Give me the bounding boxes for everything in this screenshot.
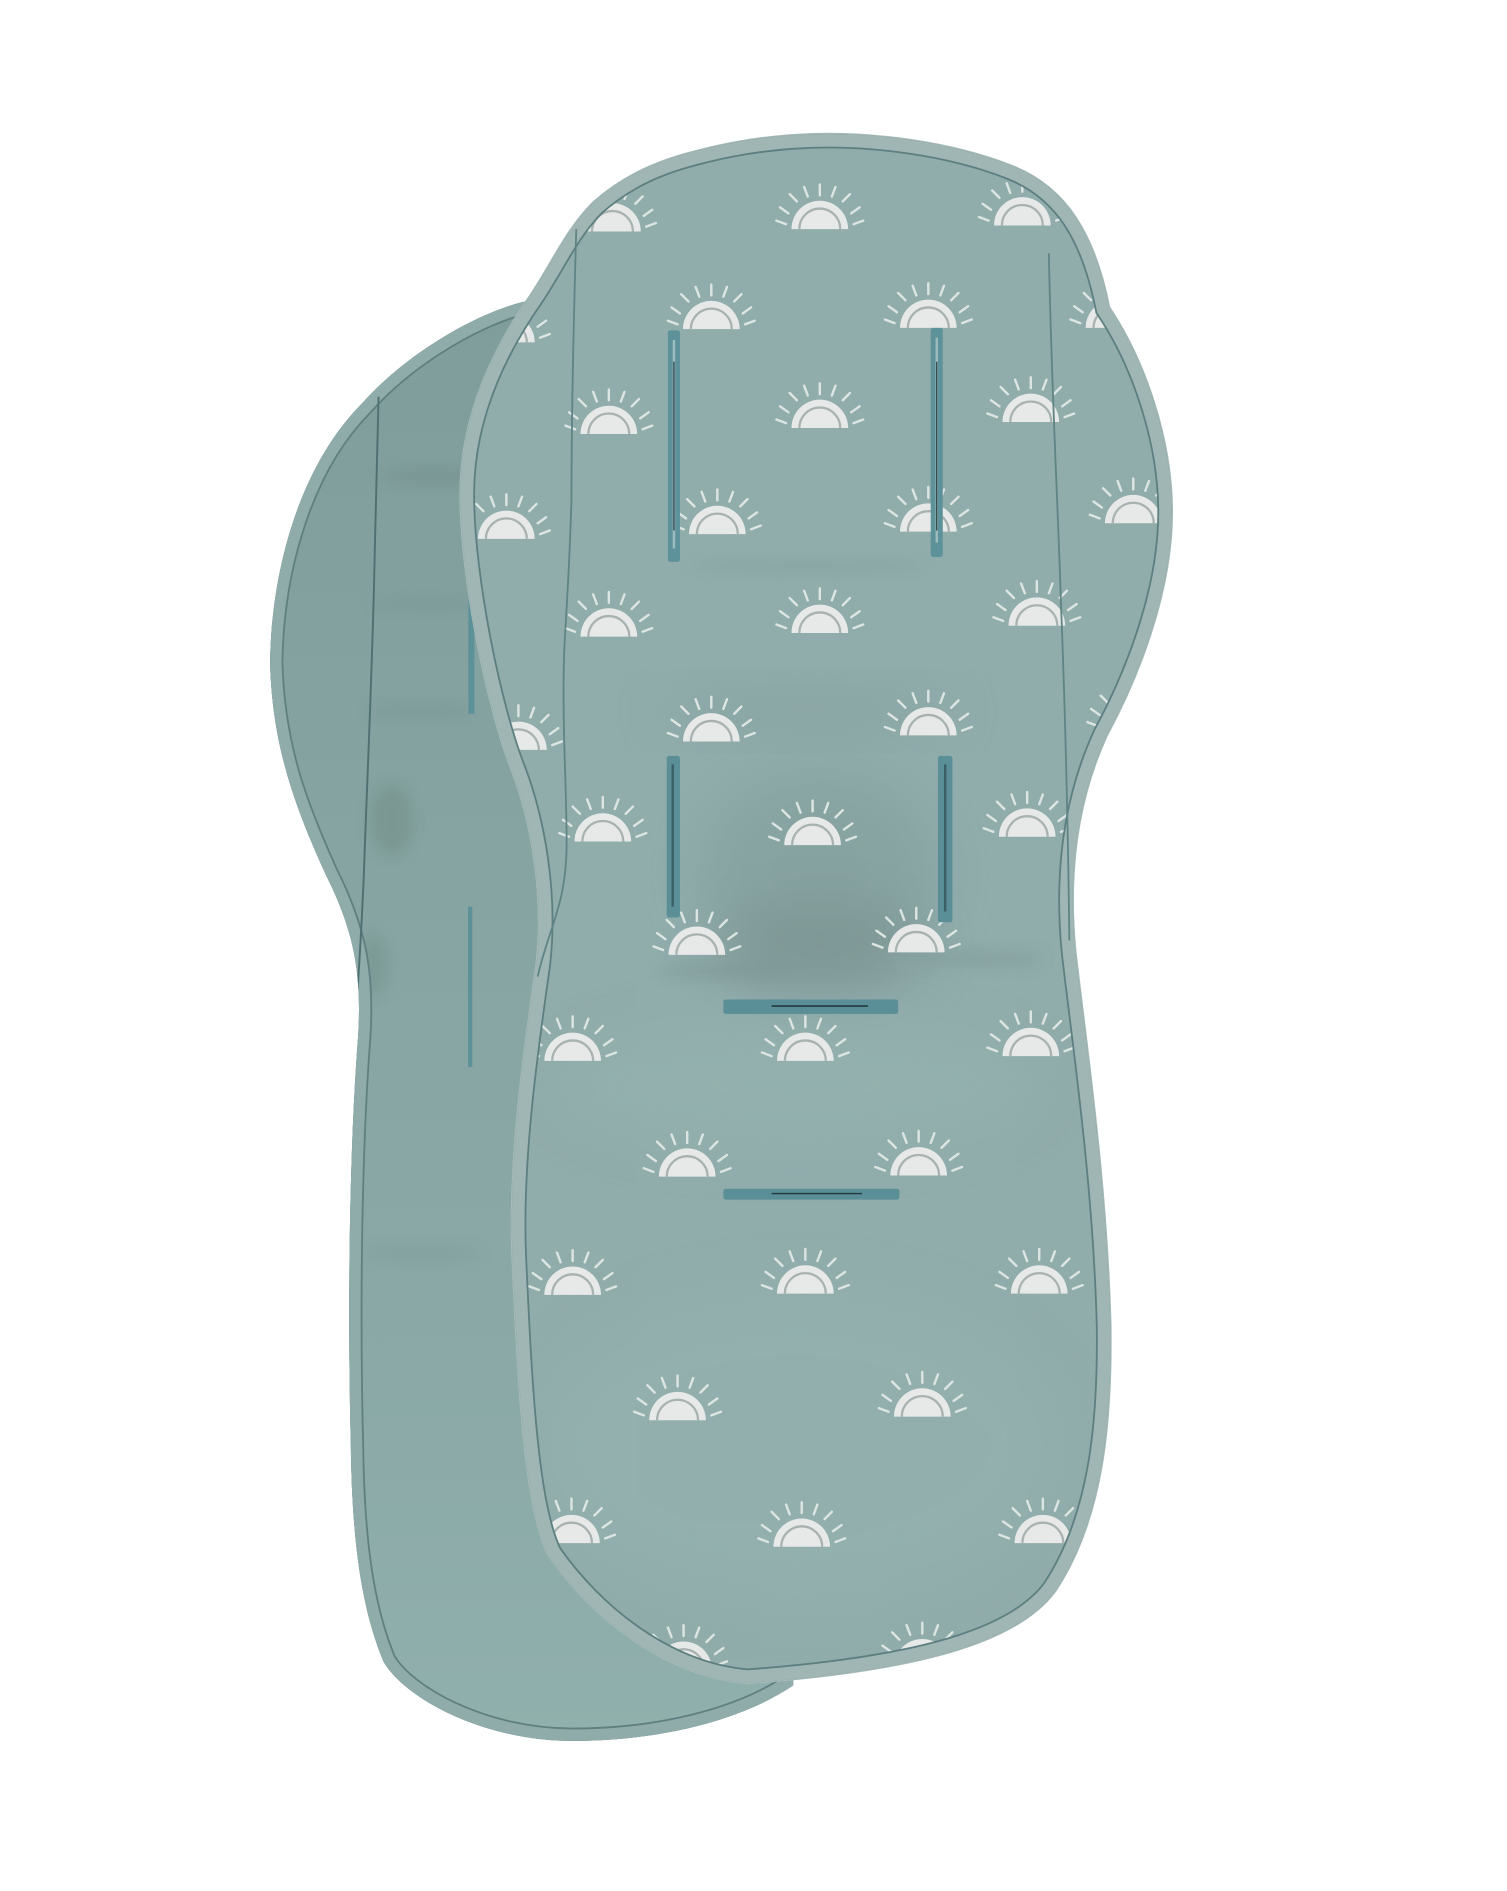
front pad: sun print side <box>461 134 1177 1683</box>
slot: lower right <box>938 756 952 922</box>
back pad stitching <box>357 397 379 1001</box>
quilting stitch lines <box>538 229 1069 977</box>
back pad: plain reverse side <box>270 301 793 1741</box>
illustration: reversible stroller seat liner <box>270 132 1173 1741</box>
slot: upper left <box>668 330 680 562</box>
piping edge <box>461 134 1172 1683</box>
back pad harness slots <box>470 597 520 1155</box>
harness slots <box>667 328 952 1200</box>
slot: upper right <box>931 328 943 557</box>
sun pattern <box>463 181 1177 1670</box>
padding shading <box>530 559 1061 1603</box>
slot: lower left <box>667 756 680 917</box>
slot: crotch lower <box>723 1189 899 1200</box>
slot: crotch upper <box>723 999 898 1014</box>
